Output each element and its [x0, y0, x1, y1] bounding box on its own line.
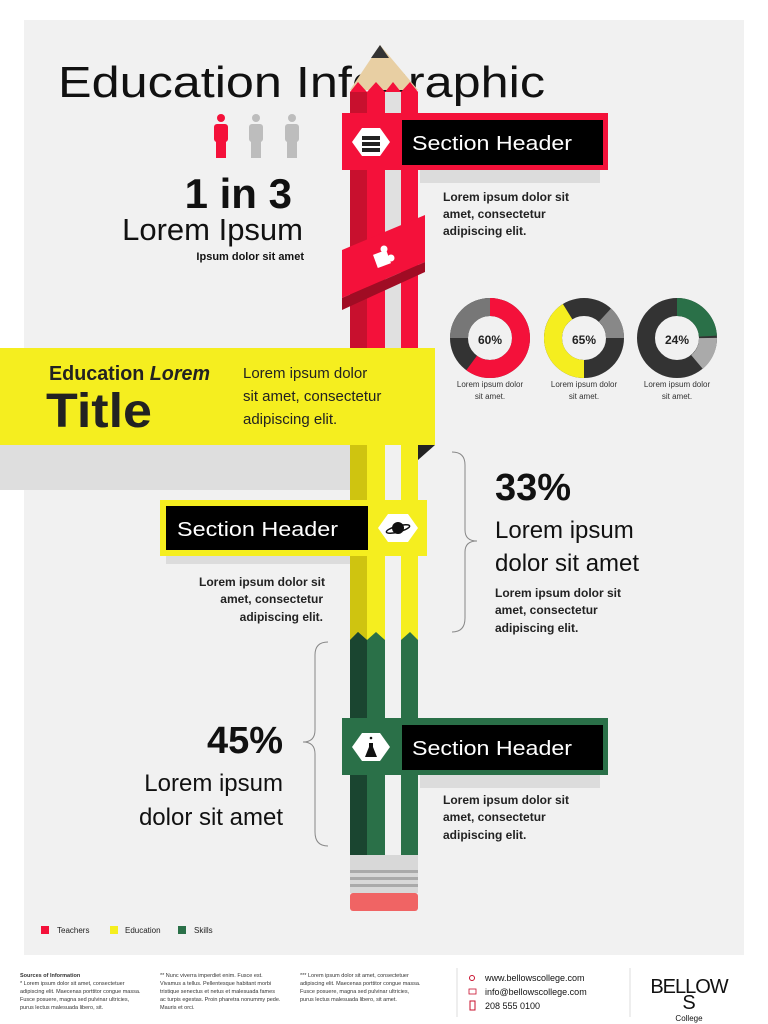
- donut 60%: [457, 307, 523, 401]
- footer sources: ** Nunc viverra imperdiet enim. Fusce est.: [160, 973, 263, 979]
- footer sources: [20, 973, 421, 1011]
- footer sources: tristique senectus et netus et malesuada fames: [160, 989, 275, 995]
- people icons: [214, 114, 299, 158]
- stat 45%: 45%: [207, 720, 283, 762]
- section header yellow: [160, 500, 427, 564]
- donut 65%: Lorem ipsum dolor: [551, 380, 617, 389]
- stat 33%: Lorem ipsum: [495, 517, 634, 544]
- stat 33%: 33%: [495, 467, 571, 509]
- footer sources: ac turpis egestas. Proin pharetra nonummy pede.: [160, 997, 281, 1003]
- stat 33%: amet, consectetur: [495, 603, 598, 617]
- text: green section: [443, 793, 569, 842]
- contact info: www.bellowscollege.com: [484, 973, 585, 983]
- brace right: [452, 452, 477, 632]
- donut 65%: [551, 307, 617, 401]
- text: red section: Lorem ipsum dolor sit: [443, 190, 569, 204]
- text: yellow section: adipiscing elit.: [240, 610, 323, 624]
- stat 33%: dolor sit amet: [495, 550, 639, 577]
- title: Education Infographic: [58, 58, 545, 107]
- eraser: [350, 893, 418, 911]
- stat 1 in 3: Ipsum dolor sit amet: [196, 251, 304, 263]
- footer sources: purus lectus malesuada libero, sit.: [20, 1005, 104, 1011]
- donut 60%: sit amet.: [475, 392, 505, 401]
- stat 45%: Lorem ipsum: [144, 770, 283, 797]
- ribbon with puzzle: [342, 215, 425, 310]
- ferrule: [350, 855, 418, 893]
- text: yellow section: amet, consectetur: [220, 592, 323, 606]
- footer sources: * Lorem ipsum dolor sit amet, consectetuer: [20, 981, 125, 987]
- icon: planet: [378, 514, 418, 542]
- section header red: [342, 113, 608, 183]
- stat 45%: dolor sit amet: [139, 804, 283, 831]
- logo: BELLOW: [650, 976, 729, 998]
- donut 24%: 24%: [665, 333, 689, 347]
- footer sources: Sources of Information: [20, 973, 81, 979]
- brace left: [303, 642, 328, 846]
- icon: books: [352, 128, 390, 156]
- stat 33%: Lorem ipsum dolor sit: [495, 586, 621, 600]
- contact info: info@bellowscollege.com: [485, 987, 587, 997]
- donut charts: [457, 307, 710, 401]
- section header green: Section Header: [412, 738, 572, 760]
- donut 65%: sit amet.: [569, 392, 599, 401]
- donut 24%: Lorem ipsum dolor: [644, 380, 710, 389]
- legend: Education: [125, 926, 161, 935]
- donut 24%: [644, 307, 710, 401]
- section header red: Section Header: [412, 133, 572, 155]
- text: green section: adipiscing elit.: [443, 828, 526, 842]
- contact info: [469, 973, 587, 1011]
- text: red section: [443, 190, 569, 238]
- logo: [650, 976, 729, 1023]
- footer sources: purus lectus malesuada libero, sit amet.: [300, 997, 397, 1003]
- stat 1 in 3: 1 in 3: [185, 170, 292, 217]
- footer sources: Mauris et orci.: [160, 1005, 195, 1011]
- donut 60%: Lorem ipsum dolor: [457, 380, 523, 389]
- yellow banner: sit amet, consectetur: [243, 388, 381, 405]
- pencil tip: [350, 45, 418, 90]
- donut 65%: 65%: [572, 333, 596, 347]
- footer sources: Fusce posuere, magna sed pulvinar ultricies,: [20, 997, 130, 1003]
- donut 60%: 60%: [478, 333, 502, 347]
- contact info: 208 555 0100: [485, 1001, 540, 1011]
- text: red section: adipiscing elit.: [443, 224, 526, 238]
- footer sources: adipiscing elit. Maecenas porttitor congue massa.: [20, 989, 141, 995]
- footer sources: Vivamus a tellus. Pellentesque habitant morbi: [160, 981, 271, 987]
- section header yellow: Section Header: [177, 519, 338, 541]
- text: yellow section: [199, 575, 325, 624]
- yellow banner: Title: [46, 385, 152, 438]
- text: green section: amet, consectetur: [443, 810, 546, 824]
- icon: flask: [352, 733, 390, 761]
- stat 45%: [139, 720, 283, 831]
- section header green: [342, 718, 608, 788]
- yellow banner: Education Lorem: [49, 363, 210, 385]
- pencil: [350, 45, 418, 911]
- legend: Teachers: [57, 926, 89, 935]
- icon: puzzle: [373, 246, 394, 268]
- stat 33%: adipiscing elit.: [495, 621, 578, 635]
- yellow banner: Lorem ipsum dolor: [243, 365, 367, 382]
- footer sources: *** Lorem ipsum dolor sit amet, consectetuer: [300, 973, 409, 979]
- footer sources: Fusce posuere, magna sed pulvinar ultricies,: [300, 989, 410, 995]
- stat 1 in 3: Lorem Ipsum: [122, 212, 303, 247]
- text: red section: amet, consectetur: [443, 207, 546, 221]
- donut 24%: sit amet.: [662, 392, 692, 401]
- footer sources: adipiscing elit. Maecenas porttitor congue massa.: [300, 981, 421, 987]
- legend: [41, 926, 213, 935]
- pencil green body: [350, 632, 418, 855]
- text: yellow section: Lorem ipsum dolor sit: [199, 575, 325, 589]
- logo: S: [682, 992, 696, 1014]
- stat 33%: [495, 467, 639, 635]
- stat 1 in 3: [122, 170, 304, 263]
- logo: College: [675, 1014, 703, 1023]
- legend: Skills: [194, 926, 213, 935]
- text: green section: Lorem ipsum dolor sit: [443, 793, 569, 807]
- yellow banner: adipiscing elit.: [243, 411, 337, 428]
- pencil red body: [350, 82, 418, 445]
- yellow banner: [0, 348, 435, 490]
- pencil yellow body: [350, 445, 418, 640]
